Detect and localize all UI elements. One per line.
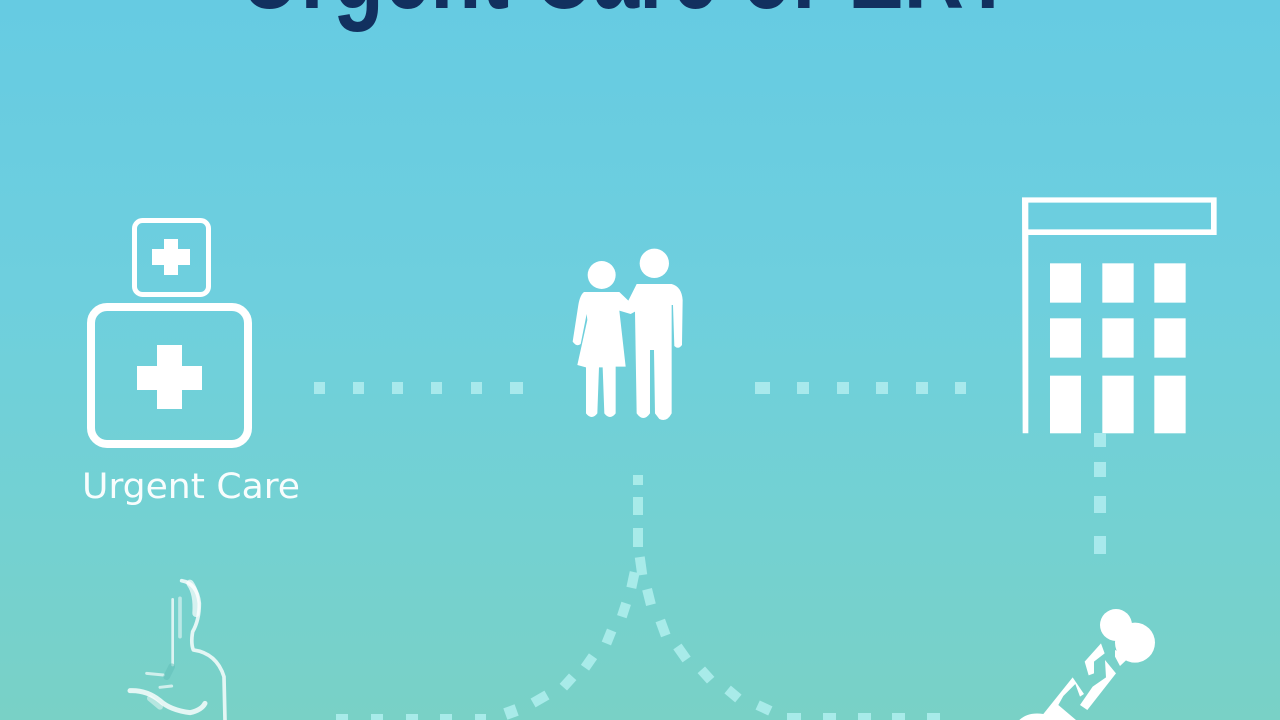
icon: hospital building [1022,197,1217,433]
icon: couple [573,249,683,420]
icon: broken bone [1019,609,1155,720]
connector: urgent care to couple [314,382,523,394]
connector: couple to hospital [755,382,966,394]
icon: urgent care kit [91,220,248,444]
connector: branching path from couple [336,475,940,720]
connector: hospital to bone [1094,433,1106,554]
label: urgent care: Urgent Care [82,467,300,507]
icon: person with injured arm [130,581,225,720]
